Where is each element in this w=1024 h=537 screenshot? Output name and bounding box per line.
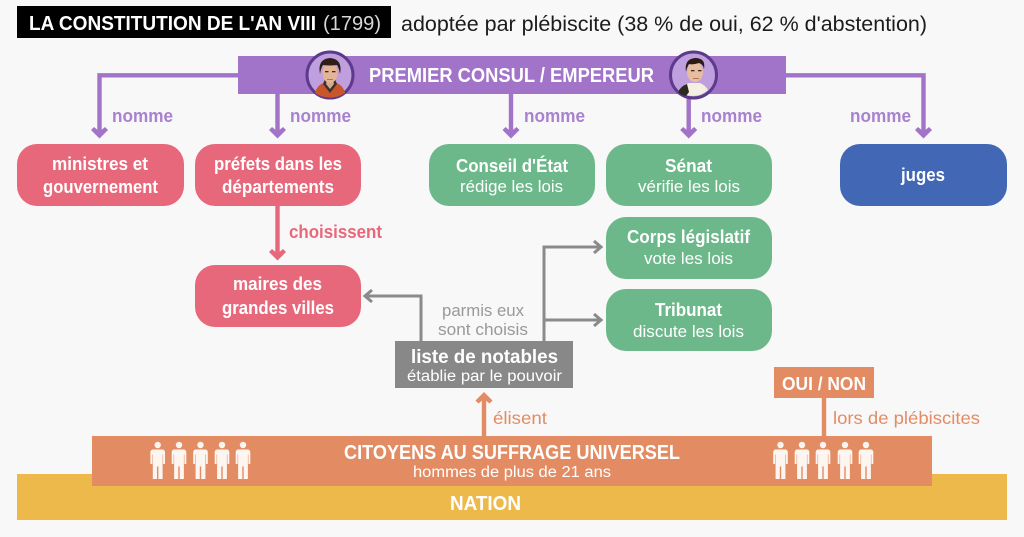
subtitle: adoptée par plébiscite (38 % de oui, 62 % d'abstention) xyxy=(401,12,927,36)
icon: people right xyxy=(773,442,873,479)
panel: conseil d'etat: Conseil d'État xyxy=(456,155,568,176)
panel: citoyens: hommes de plus de 21 ans xyxy=(413,464,611,481)
panel: prefets xyxy=(195,144,361,206)
arrow: nomme conseil xyxy=(502,94,520,138)
panel: ministres xyxy=(17,144,184,206)
title: LA CONSTITUTION DE L'AN VIII xyxy=(29,13,316,35)
panel: maires: grandes villes xyxy=(222,298,334,318)
panel: tribunat: discute les lois xyxy=(633,323,744,341)
panel: juges xyxy=(840,144,1007,206)
panel: liste de notables: liste de notables xyxy=(411,347,558,368)
arrow: nomme senat xyxy=(680,94,697,138)
panel: senat: vérifie les lois xyxy=(638,178,740,196)
panel: conseil d'etat: rédige les lois xyxy=(460,178,563,196)
label: elisent: élisent xyxy=(493,408,547,428)
panel: maires xyxy=(195,265,361,327)
panel: senat: Sénat xyxy=(665,156,712,176)
panel: tribunat: Tribunat xyxy=(655,300,722,320)
panel: nation: NATION xyxy=(450,493,521,515)
connector: oui non xyxy=(822,398,826,436)
panel: corps legislatif: Corps législatif xyxy=(627,227,751,247)
panel: corps legislatif xyxy=(606,217,772,279)
icon: portrait premier consul xyxy=(307,52,353,98)
arrow: nomme prefets xyxy=(269,94,286,138)
panel: prefets: départements xyxy=(222,177,334,197)
panel: senat xyxy=(606,144,772,206)
panel: ministres: gouvernement xyxy=(43,177,158,197)
label: parmis eux sont choisis: sont choisis xyxy=(438,321,528,339)
panel: conseil d'etat xyxy=(429,144,595,206)
arrow: choisissent xyxy=(269,206,286,260)
panel: nation xyxy=(17,474,1007,520)
arrow: elisent xyxy=(476,392,492,437)
panel: prefets: préfets dans les xyxy=(214,154,342,174)
panel: corps legislatif: vote les lois xyxy=(644,250,733,268)
title xyxy=(17,6,391,38)
panel: citoyens: CITOYENS AU SUFFRAGE UNIVERSEL xyxy=(344,442,680,464)
label: nomme 3: nomme xyxy=(524,105,585,126)
panel: ministres: ministres et xyxy=(52,154,148,174)
panel: oui non xyxy=(774,367,874,398)
label: parmis eux sont choisis: parmis eux xyxy=(442,302,525,320)
arrow: vers maires xyxy=(365,290,421,341)
arrow: nomme juges xyxy=(786,75,932,138)
panel: tribunat xyxy=(606,289,772,351)
label: nomme 1: nomme xyxy=(112,105,173,126)
arrow: vers corps et tribunat xyxy=(544,241,601,341)
label: parmis eux sont choisis xyxy=(438,302,528,339)
label: nomme 2: nomme xyxy=(290,105,351,126)
panel: maires: maires des xyxy=(233,274,322,294)
icon: portrait empereur xyxy=(670,52,716,98)
panel: juges: juges xyxy=(900,165,945,185)
label: lors de plebiscites: lors de plébiscites xyxy=(833,408,980,428)
panel: premier consul bar: PREMIER CONSUL / EMPEREUR xyxy=(369,65,655,87)
panel: citoyens xyxy=(92,436,932,486)
panel: liste de notables: établie par le pouvoir xyxy=(407,368,562,385)
panel: oui non: OUI / NON xyxy=(782,374,866,394)
arrow: nomme ministres xyxy=(91,75,238,138)
icon: people left xyxy=(150,442,250,479)
label: choisissent: choisissent xyxy=(289,222,382,242)
label: nomme 4: nomme xyxy=(701,105,762,126)
panel: premier consul bar xyxy=(238,56,786,94)
label: nomme 5: nomme xyxy=(850,105,911,126)
panel: liste de notables xyxy=(395,341,573,388)
title: (1799) xyxy=(323,13,381,35)
